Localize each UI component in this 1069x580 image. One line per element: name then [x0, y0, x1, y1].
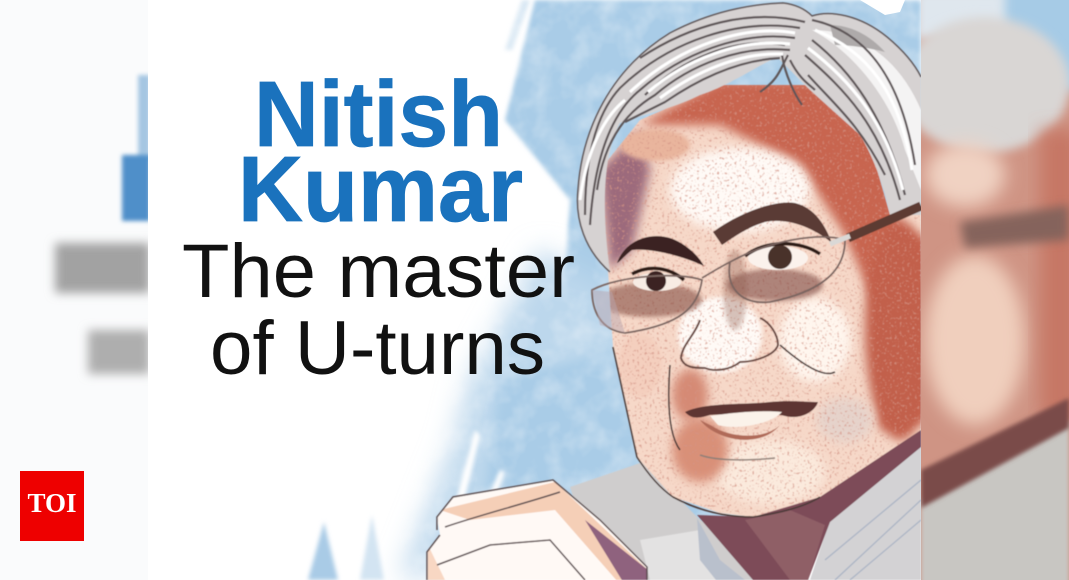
jacket	[570, 462, 810, 580]
panel: blurred left background	[46, 72, 148, 382]
heading: Nitish Kumar	[244, 78, 522, 222]
logo: TOI: TOI	[27, 488, 77, 518]
nose	[681, 318, 778, 370]
skin speckle	[606, 86, 921, 516]
subheading: The master of U-turns: The master	[182, 229, 575, 314]
subheading: The master of U-turns: of U-turns	[210, 306, 545, 391]
watercolor wash	[308, 0, 921, 580]
hand	[427, 480, 648, 580]
logo: TOI	[20, 471, 84, 541]
eyes	[632, 244, 820, 291]
illustration: portrait	[427, 3, 935, 580]
mouth	[685, 401, 818, 460]
glasses	[592, 206, 921, 333]
heading: Nitish Kumar: Kumar	[238, 137, 523, 241]
heading: Nitish Kumar: Nitish	[254, 62, 503, 166]
panel: central artwork	[148, 0, 935, 580]
subheading: The master of U-turns	[184, 242, 574, 374]
neck	[697, 425, 921, 580]
hair	[577, 3, 921, 272]
face outline	[613, 345, 835, 517]
eyebrows	[617, 203, 832, 266]
face	[604, 84, 921, 517]
panel: blurred right background	[921, 0, 1069, 580]
